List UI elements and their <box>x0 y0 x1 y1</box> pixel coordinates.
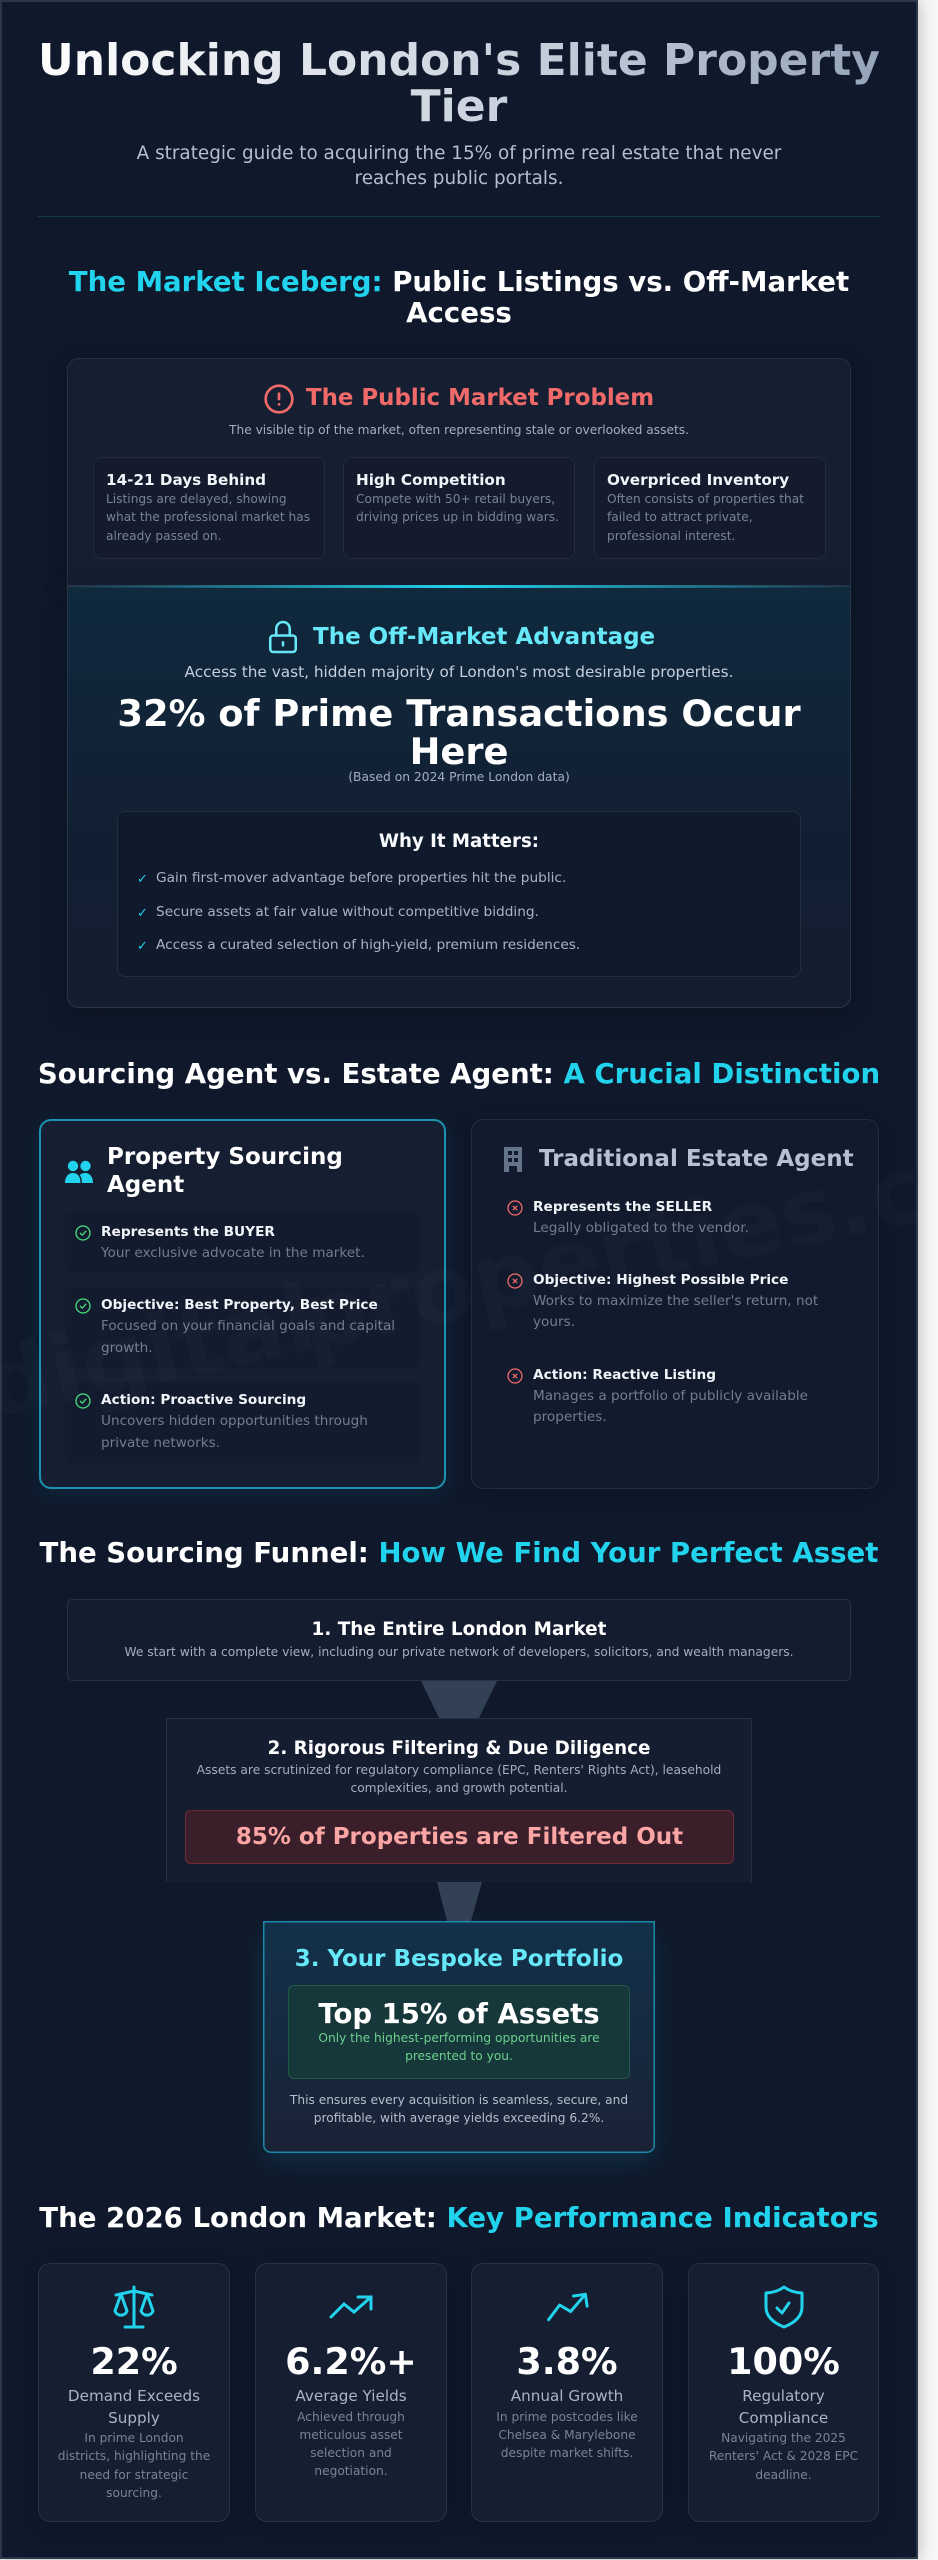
card: overpriced inventory <box>594 457 826 559</box>
panel: public market problem <box>67 358 851 586</box>
icon: trending up angled <box>547 2292 589 2322</box>
item: action reactive: Action: Reactive Listing <box>533 1366 716 1382</box>
kpi card: demand: 22% <box>90 2340 178 2383</box>
kpi card: yields: meticulous asset <box>299 2428 403 2442</box>
card: overpriced inventory: Often consists of properties that <box>607 492 804 506</box>
text: filtering: complexities, and growth potential. <box>350 1781 568 1795</box>
item: represents buyer: Your exclusive advocate in the market. <box>101 1245 365 1261</box>
heading: kpis: The 2026 London Market: Key Performance Indicators <box>39 2200 879 2234</box>
heading: property sourcing agent: Property Sourcing <box>107 1144 343 1170</box>
subtitle <box>136 143 782 189</box>
icon: scales <box>114 2286 154 2328</box>
item: represents buyer <box>65 1213 419 1273</box>
icon: lock <box>268 620 298 654</box>
kpi card: compliance <box>688 2263 879 2522</box>
heading: why it matters: Why It Matters: <box>379 831 539 852</box>
subtitle: reaches public portals. <box>355 168 563 189</box>
item: represents buyer: Represents the BUYER <box>101 1224 275 1240</box>
icon: users <box>65 1160 93 1183</box>
item: represents seller <box>507 1198 749 1236</box>
panel: why it matters <box>117 811 801 977</box>
kpi card: growth: In prime postcodes like <box>496 2410 638 2424</box>
funnel step 2 <box>166 1718 752 1882</box>
card: days behind <box>93 457 325 559</box>
icon: building <box>504 1147 522 1172</box>
heading: market iceberg: Access <box>406 296 512 329</box>
callout: 85 percent filtered: 85% of Properties are Filtered Out <box>236 1824 683 1850</box>
text: filtering <box>196 1763 721 1795</box>
callout: top 15 percent: Only the highest-performing opportunities are <box>318 2031 600 2045</box>
item: objective best property: Focused on your financial goals and capital <box>101 1318 395 1334</box>
card: high competition: High Competition <box>356 471 506 489</box>
item: objective highest price: Objective: Highest Possible Price <box>533 1272 788 1288</box>
kpi card: yields <box>255 2263 447 2522</box>
callout: top 15 percent: presented to you. <box>405 2049 513 2063</box>
callout: top 15 percent <box>288 1985 630 2079</box>
funnel step 1 <box>67 1599 851 1681</box>
text: filtering: Assets are scrutinized for regulatory compliance (EPC, Renters' Rights Act), leasehold <box>197 1763 721 1777</box>
kpi card: yields: negotiation. <box>314 2464 388 2478</box>
title <box>38 35 880 132</box>
card: high competition: Compete with 50+ retail buyers, <box>356 492 555 506</box>
kpi card: demand: Supply <box>108 2408 160 2426</box>
icon: alert circle <box>264 384 294 414</box>
item: represents seller: Represents the SELLER <box>533 1198 712 1214</box>
card: days behind: Listings are delayed, showing <box>106 492 287 506</box>
kpi card: demand <box>38 2263 230 2522</box>
heading: filtering: 2. Rigorous Filtering & Due Diligence <box>268 1738 650 1759</box>
item: action proactive <box>65 1382 419 1463</box>
item: action proactive: Action: Proactive Sourcing <box>101 1392 306 1408</box>
item: action reactive: properties. <box>533 1409 607 1425</box>
kpi card: demand: need for strategic <box>80 2468 188 2482</box>
list item: curated selection: Access a curated selection of high-yield, premium residences. <box>156 937 580 953</box>
kpi card: compliance: Navigating the 2025 <box>721 2431 846 2445</box>
card: high competition <box>343 457 575 559</box>
icon: shield check <box>764 2286 804 2328</box>
item: objective highest price: yours. <box>533 1314 575 1330</box>
kpi card: yields: 6.2%+ <box>285 2340 417 2383</box>
kpi card: growth: Chelsea & Marylebone <box>498 2428 636 2442</box>
heading: public market problem: The Public Market Problem <box>306 385 654 411</box>
kpi card: yields: Average Yields <box>295 2387 407 2405</box>
heading: sourcing funnel: The Sourcing Funnel: How We Find Your Perfect Asset <box>40 1536 878 1569</box>
text: portfolio note <box>290 2093 628 2125</box>
kpi card: growth: 3.8% <box>516 2340 618 2383</box>
heading: property sourcing agent <box>107 1144 343 1198</box>
item: action reactive: Manages a portfolio of publicly available <box>533 1388 808 1404</box>
kpi card: compliance: Regulatory <box>742 2387 825 2405</box>
kpi card: yields: Achieved through <box>297 2410 405 2424</box>
panel: why it matters: ✓ <box>137 939 148 954</box>
card: overpriced inventory: professional interest. <box>607 529 735 543</box>
stat: 32 percent: Here <box>410 730 508 772</box>
heading: traditional estate agent: Traditional Estate Agent <box>539 1146 854 1172</box>
stat: 32 percent <box>117 692 801 772</box>
kpi card: demand: sourcing. <box>106 2486 162 2500</box>
panel: off-market advantage <box>67 586 851 1008</box>
kpi card: yields: selection and <box>310 2446 392 2460</box>
glow divider <box>67 584 851 588</box>
title: Unlocking London's Elite Property <box>38 35 880 86</box>
item: action reactive <box>507 1366 808 1425</box>
title: Tier <box>411 81 507 132</box>
panel: why it matters: ✓ <box>137 872 148 887</box>
kpi card: growth: despite market shifts. <box>501 2446 633 2460</box>
arrow: funnel connector 2 <box>437 1882 482 1921</box>
icon: trending up <box>329 2295 373 2319</box>
list item: first mover: Gain first-mover advantage before properties hit the public. <box>156 870 566 886</box>
text: portfolio note: profitable, with average yields exceeding 6.2%. <box>314 2111 604 2125</box>
kpi card: compliance: Renters' Act & 2028 EPC <box>709 2449 858 2463</box>
heading: sourcing vs estate: Sourcing Agent vs. Estate Agent: A Crucial Distinction <box>38 1057 880 1090</box>
heading: market iceberg: The Market Iceberg: Public Listings vs. Off-Market <box>69 265 849 298</box>
heading: property sourcing agent: Agent <box>107 1172 184 1198</box>
text: data note: (Based on 2024 Prime London data) <box>348 770 570 784</box>
text: public subtitle: The visible tip of the market, often representing stale or overlooked assets. <box>229 423 689 437</box>
panel: traditional estate agent <box>471 1119 879 1489</box>
kpi card: demand: districts, highlighting the <box>58 2449 210 2463</box>
funnel step 3 <box>263 1921 655 2153</box>
item: action proactive: private networks. <box>101 1435 220 1451</box>
card: overpriced inventory: Overpriced Inventory <box>607 471 789 489</box>
heading: market iceberg <box>68 265 849 329</box>
item: represents seller: Legally obligated to the vendor. <box>533 1220 749 1236</box>
kpi card: growth <box>471 2263 663 2522</box>
item: action proactive: Uncovers hidden opportunities through <box>101 1413 368 1429</box>
item: objective best property <box>65 1287 419 1368</box>
kpi card: demand: Demand Exceeds <box>68 2387 200 2405</box>
kpi card: growth: Annual Growth <box>511 2387 623 2405</box>
callout: 85 percent filtered <box>185 1810 734 1864</box>
card: days behind: 14-21 Days Behind <box>106 471 266 489</box>
item: objective best property: Objective: Best Property, Best Price <box>101 1297 378 1313</box>
panel: why it matters: ✓ <box>137 906 148 920</box>
card: days behind: what the professional market has <box>106 510 310 524</box>
panel: property sourcing agent <box>39 1119 446 1489</box>
arrow: funnel connector 1 <box>421 1681 497 1718</box>
heading: entire market: 1. The Entire London Market <box>312 1619 606 1640</box>
callout: top 15 percent: Top 15% of Assets <box>318 1998 600 2030</box>
kpi card: compliance: deadline. <box>755 2468 812 2482</box>
text: advantage subtitle: Access the vast, hidden majority of London's most desirable properties. <box>185 663 733 681</box>
stat: 32 percent: 32% of Prime Transactions Occur <box>117 692 801 735</box>
heading: bespoke portfolio: 3. Your Bespoke Portfolio <box>295 1946 623 1972</box>
subtitle: A strategic guide to acquiring the 15% of prime real estate that never <box>137 143 781 164</box>
kpi card: compliance: 100% <box>727 2340 840 2383</box>
text: portfolio note: This ensures every acquisition is seamless, secure, and <box>290 2093 628 2107</box>
list item: fair value: Secure assets at fair value without competitive bidding. <box>156 904 539 920</box>
card: days behind: already passed on. <box>106 529 221 543</box>
item: objective best property: growth. <box>101 1340 153 1356</box>
item: objective highest price: Works to maximize the seller's return, not <box>533 1293 818 1309</box>
kpi card: demand: In prime London <box>84 2431 184 2445</box>
item: objective highest price <box>507 1272 818 1330</box>
heading: off-market advantage: The Off-Market Advantage <box>313 624 655 650</box>
kpi card: compliance: Compliance <box>739 2408 828 2426</box>
card: overpriced inventory: failed to attract private, <box>607 510 753 524</box>
card: high competition: driving prices up in bidding wars. <box>356 510 559 524</box>
text: entire market: We start with a complete view, including our private network of developers, solicitors, and wealth managers. <box>124 1645 794 1659</box>
